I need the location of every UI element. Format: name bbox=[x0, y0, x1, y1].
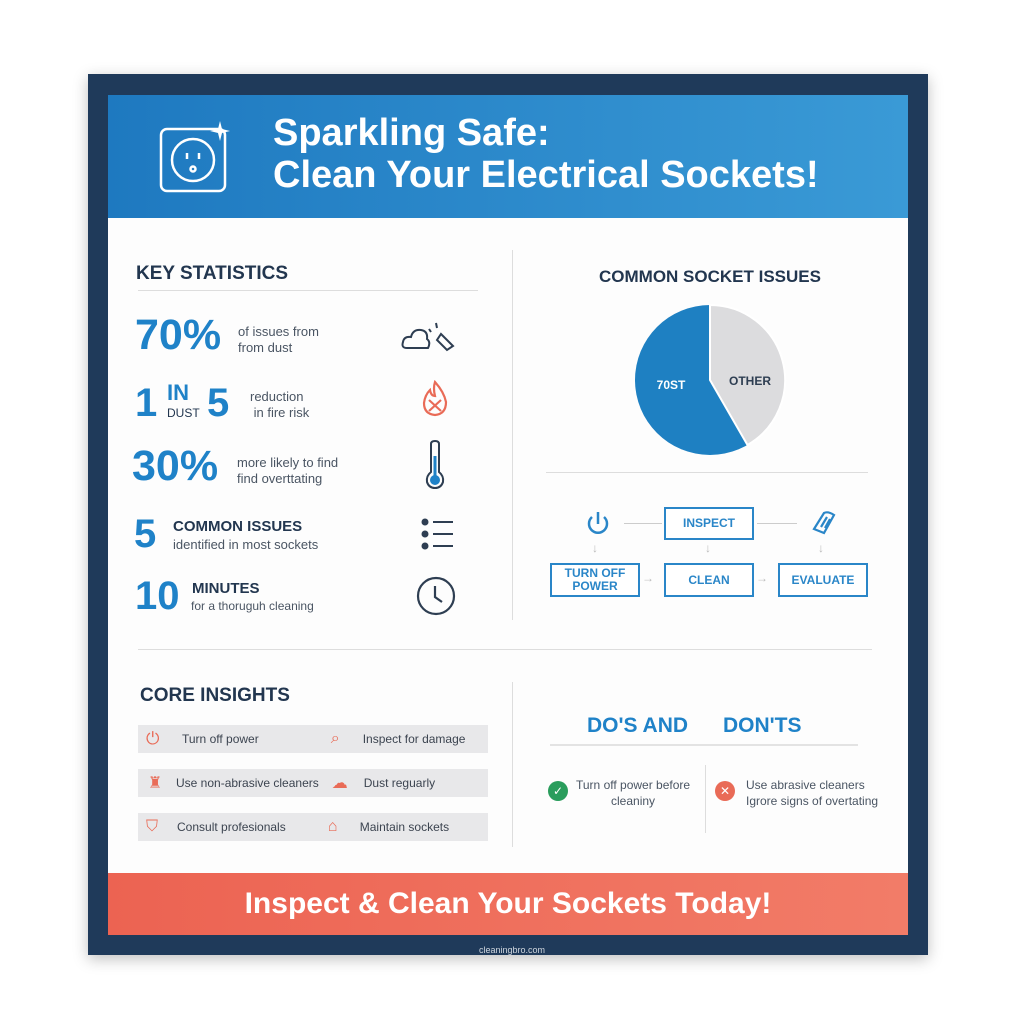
box: turn off power: TURN OFF bbox=[565, 566, 625, 580]
frame bbox=[88, 74, 928, 955]
stat 1 in 5 bbox=[135, 380, 448, 425]
footer banner: Inspect & Clean Your Sockets Today! bbox=[245, 887, 771, 920]
title bbox=[273, 112, 819, 196]
flowchart: → bbox=[642, 571, 654, 585]
stat 1 in 5: IN bbox=[167, 380, 189, 405]
insight row 1: Turn off power Inspect for damage bbox=[182, 732, 465, 746]
stat 70%: 70% bbox=[135, 311, 221, 359]
stat 70% bbox=[135, 311, 454, 359]
heading: COMMON SOCKET ISSUES bbox=[599, 267, 821, 286]
icon: clock bbox=[416, 576, 456, 616]
stat 1 in 5: DUST bbox=[167, 406, 200, 420]
don't item: Igrore signs of overtating bbox=[746, 794, 878, 808]
insight row 2: ☁ bbox=[332, 775, 348, 792]
title: Clean Your Electrical Sockets! bbox=[273, 154, 819, 196]
stat 30%: find overttating bbox=[237, 471, 322, 486]
stat 5 issues bbox=[134, 512, 453, 556]
stat 5 issues: COMMON ISSUES bbox=[173, 518, 302, 535]
insight row 3 bbox=[138, 813, 488, 841]
stat 10 minutes bbox=[135, 574, 456, 618]
don't item: ✕ bbox=[720, 784, 730, 798]
flowchart: ↓ bbox=[705, 541, 711, 555]
box: inspect: INSPECT bbox=[683, 516, 735, 530]
stat 30%: 30% bbox=[132, 442, 218, 490]
box: clean: CLEAN bbox=[688, 572, 730, 586]
insight row 2 bbox=[138, 769, 488, 797]
stat 1 in 5: 5 bbox=[207, 381, 229, 425]
panel: common socket issues bbox=[599, 267, 821, 455]
don't item: Use abrasive cleaners bbox=[746, 778, 865, 792]
do item: cleaniny bbox=[611, 794, 655, 808]
panel: key statistics bbox=[132, 263, 478, 618]
heading: KEY STATISTICS bbox=[136, 263, 288, 284]
stat 1 in 5: in fire risk bbox=[254, 405, 309, 420]
icon: dust plug bbox=[402, 322, 454, 352]
icon: power bbox=[588, 512, 608, 534]
flowchart: → bbox=[756, 571, 768, 585]
stat 10 minutes: for a thoruguh cleaning bbox=[191, 599, 314, 613]
do item: ✓ bbox=[553, 784, 563, 798]
stat 1 in 5: reduction bbox=[250, 389, 303, 404]
insight row 3: ⛉ bbox=[146, 818, 158, 835]
box: turn off power bbox=[550, 563, 640, 597]
icon: thermometer bbox=[426, 440, 444, 489]
stat 5 issues: identified in most sockets bbox=[173, 537, 318, 552]
do item bbox=[548, 778, 690, 808]
pie chart: 70ST bbox=[657, 378, 686, 392]
insight row 2: Use non-abrasive cleaners Dust reguarly bbox=[176, 776, 435, 790]
insight row 1 bbox=[138, 725, 488, 753]
icon: cleaning brush bbox=[812, 511, 836, 534]
panel: do's and don'ts bbox=[548, 714, 878, 833]
heading: DO'S AND bbox=[587, 714, 688, 737]
stat 70%: of issues from bbox=[238, 324, 319, 339]
pie chart: OTHER bbox=[729, 374, 771, 388]
stat 10 minutes: MINUTES bbox=[192, 580, 260, 597]
panel: core insights bbox=[138, 685, 488, 841]
insight row 1: ⏻ bbox=[146, 729, 159, 748]
box: evaluate: EVALUATE bbox=[792, 572, 854, 586]
content area bbox=[108, 218, 908, 873]
flowchart: ↓ bbox=[818, 541, 824, 555]
flowchart bbox=[550, 507, 868, 597]
stat 30%: more likely to find bbox=[237, 455, 338, 470]
flowchart: ↓ bbox=[592, 541, 598, 555]
source credit: cleaningbro.com bbox=[479, 945, 545, 955]
stat 30% bbox=[132, 440, 444, 490]
header banner bbox=[108, 95, 908, 218]
insight row 2: ♜ bbox=[148, 775, 162, 792]
insight row 1: ⌕ bbox=[331, 730, 340, 747]
do item: Turn off power before bbox=[576, 778, 690, 792]
box: inspect bbox=[664, 507, 754, 540]
icon: list bbox=[422, 518, 453, 550]
stat 10 minutes: 10 bbox=[135, 574, 180, 618]
heading: CORE INSIGHTS bbox=[140, 685, 290, 706]
icon: socket bbox=[160, 121, 230, 192]
icon: fire bbox=[422, 380, 448, 416]
don't item bbox=[715, 778, 878, 808]
box: evaluate bbox=[778, 563, 868, 597]
insight row 3: ⌂ bbox=[328, 818, 337, 835]
panel: do's and don'ts: DON'TS bbox=[723, 714, 802, 737]
box: clean bbox=[664, 563, 754, 597]
pie chart bbox=[635, 305, 784, 455]
stat 1 in 5: 1 bbox=[135, 381, 157, 425]
footer banner bbox=[108, 873, 908, 935]
box: turn off power: POWER bbox=[572, 579, 618, 593]
title: Sparkling Safe: bbox=[273, 112, 550, 154]
stat 5 issues: 5 bbox=[134, 512, 156, 556]
stat 70%: from dust bbox=[238, 340, 292, 355]
insight row 3: Consult profesionals Maintain sockets bbox=[177, 820, 449, 834]
